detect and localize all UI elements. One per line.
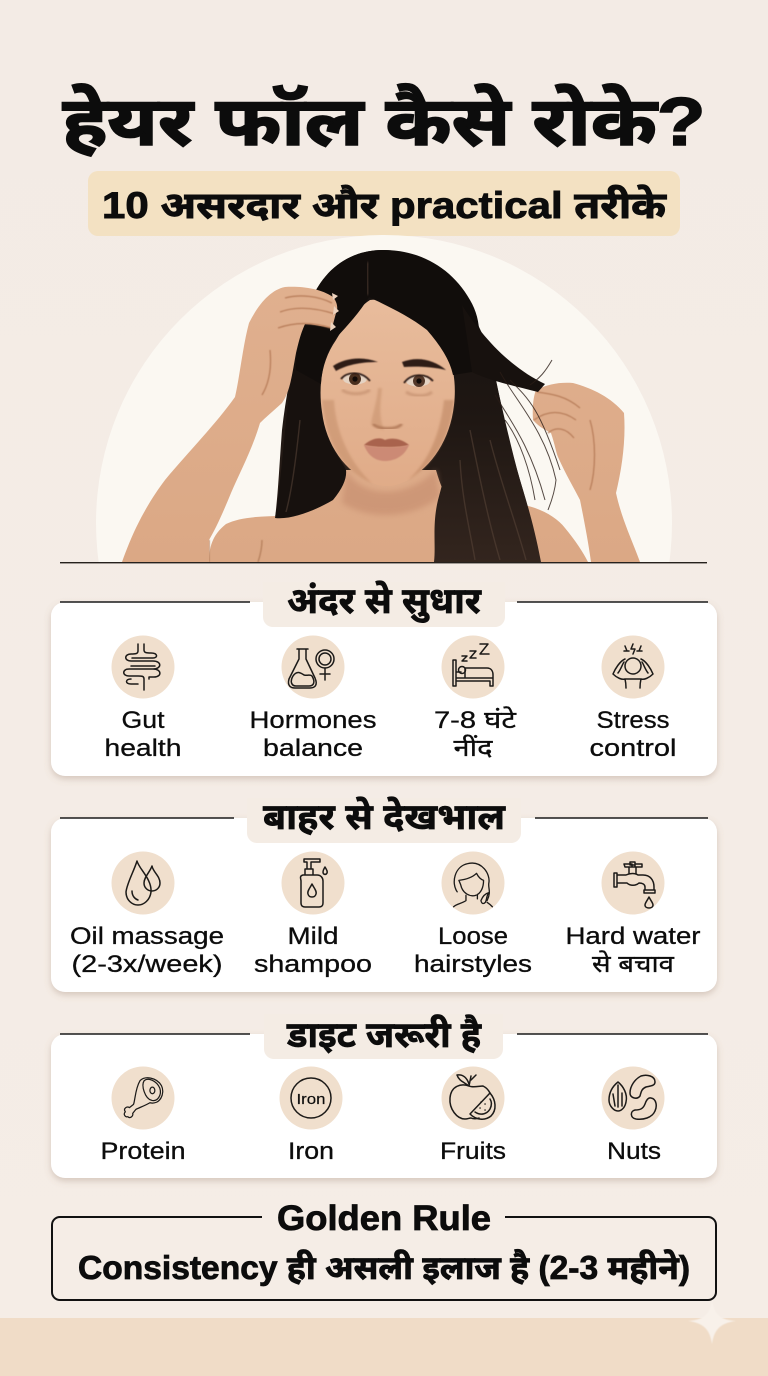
icon: iron: [280, 1066, 342, 1130]
arm crease: [209, 540, 262, 562]
subtitle banner: 10 असरदार और practical तरीके: [102, 184, 667, 226]
label: control: [590, 735, 676, 762]
label: Gut: [122, 707, 165, 734]
subtitle banner: [88, 171, 680, 236]
label: Hormones: [250, 707, 376, 734]
label: health: [104, 735, 182, 762]
icon: fruits: [442, 1066, 504, 1130]
neck shading: [342, 470, 440, 515]
hair over right shoulder: [434, 381, 541, 562]
label: 7-8 घंटे: [434, 706, 517, 734]
icon: shampoo: [282, 852, 344, 914]
icon: sleep: [442, 636, 504, 698]
label: Nuts: [607, 1138, 661, 1165]
icon: iron: Iron: [296, 1091, 326, 1108]
face side shadow: [322, 400, 372, 483]
panel: diet: [51, 1013, 717, 1178]
label: Protein: [100, 1138, 186, 1165]
eyebrows: [333, 359, 378, 371]
panel: inner care: [51, 579, 717, 776]
title: हेयर फॉल कैसे रोके?: [62, 84, 706, 160]
divider under photo: [60, 562, 707, 563]
icon: gut: [112, 636, 174, 698]
hair left of face: [275, 422, 346, 518]
nose: [371, 388, 384, 430]
label: Oil massage: [70, 923, 224, 950]
raised right hand: [533, 383, 640, 562]
label: Mild: [288, 923, 338, 950]
heading: golden rule: Golden Rule: [277, 1199, 491, 1238]
card: [51, 602, 717, 776]
icon: stress: [602, 636, 664, 698]
icon: nuts: [602, 1066, 664, 1130]
top hair and hairline: [296, 250, 479, 384]
hair lights: [286, 420, 526, 560]
label: Fruits: [440, 1138, 506, 1165]
label: से बचाव: [592, 950, 675, 978]
panel: outer care: [51, 795, 717, 992]
lips: [364, 438, 409, 447]
raised left arm and hand: [122, 287, 337, 562]
back hair: [275, 250, 526, 516]
heading: inner care: अंदर से सुधार: [287, 579, 482, 623]
rule text: Consistency ही असली इलाज है (2-3 महीने): [78, 1248, 690, 1286]
label: Hard water: [566, 923, 701, 950]
icon: loose hairstyle: [442, 852, 504, 914]
label: shampoo: [254, 951, 372, 978]
heading: outer care: बाहर से देखभाल: [263, 795, 506, 837]
label: Iron: [288, 1138, 334, 1165]
icon: water tap: [602, 852, 664, 914]
card: [51, 1034, 717, 1178]
label: (2-3x/week): [72, 951, 222, 978]
icon: oil drops: [112, 852, 174, 914]
icon: hormones: [282, 636, 344, 698]
bottom band: [0, 1318, 768, 1376]
icon: protein: [112, 1066, 174, 1130]
heading: diet: डाइट जरूरी है: [286, 1013, 482, 1055]
face: [321, 300, 455, 486]
fingertips left: [330, 293, 339, 331]
card: [51, 818, 717, 992]
label: Loose: [438, 923, 508, 950]
label: hairstyles: [414, 951, 532, 978]
finger creases: [262, 296, 335, 395]
parting highlight: [367, 261, 368, 296]
label: नींद: [454, 734, 493, 762]
under-eye shadow: [342, 390, 432, 396]
label: balance: [263, 735, 363, 762]
heading: inner care: [263, 579, 505, 627]
torso and shoulders: [209, 470, 588, 562]
pulled hair strand: [481, 332, 545, 392]
icon: sparkle: [688, 1300, 736, 1344]
label: Stress: [596, 707, 670, 734]
panel: golden rule: [52, 1199, 716, 1300]
eyes: [343, 374, 367, 384]
finger creases right: [534, 392, 594, 490]
hero photo: woman checking hair fall: [96, 235, 672, 562]
